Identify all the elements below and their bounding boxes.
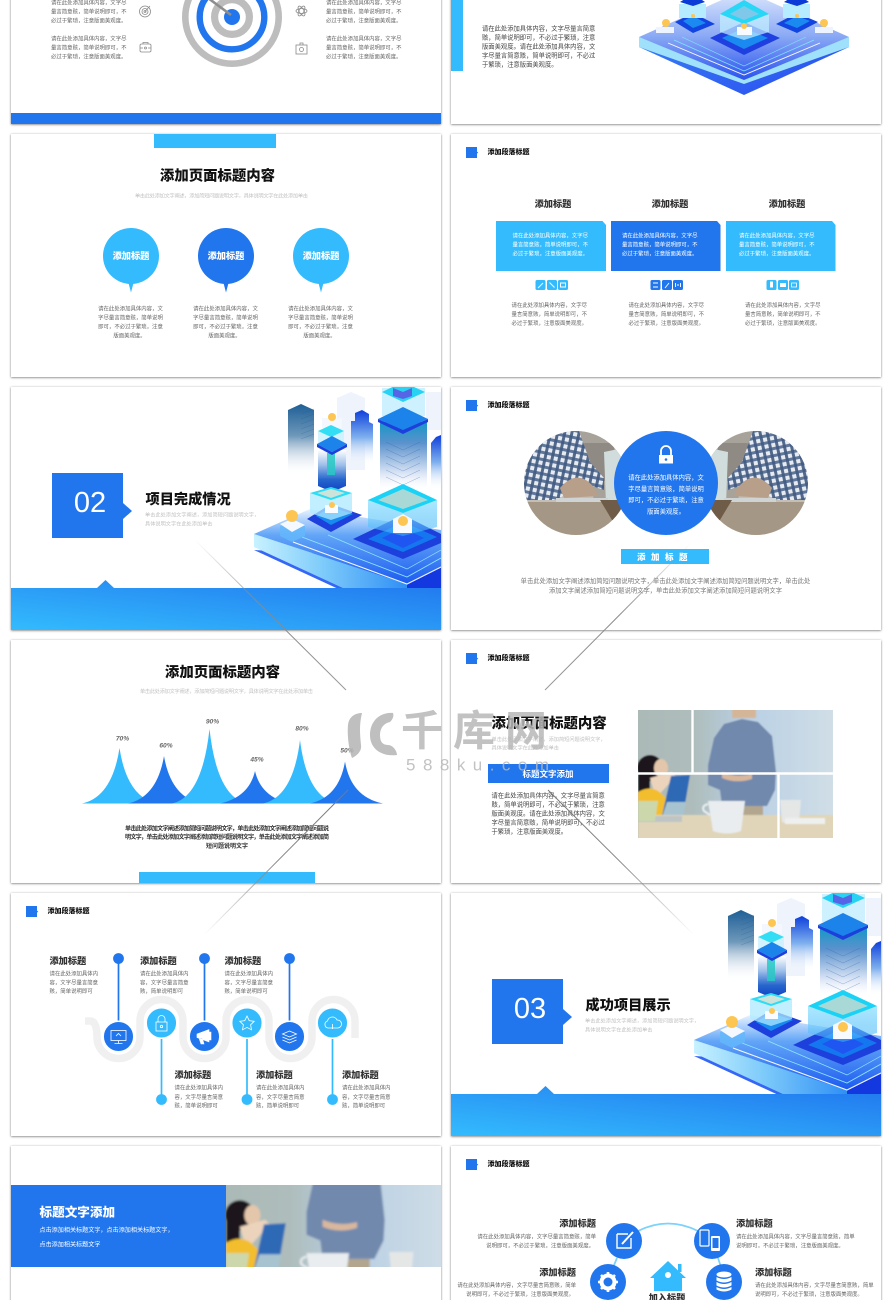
title: 添加页面标题内容 — [165, 663, 281, 681]
item: lower right: 添加标题 — [755, 1266, 793, 1278]
chart: peaks: 45% — [249, 756, 264, 764]
text block: top right: 请在此处添加具体内容，文字尽 — [326, 0, 402, 6]
chart: peaks: 80% — [295, 726, 309, 732]
watermark logo — [348, 713, 397, 758]
node: monitor — [103, 1021, 134, 1052]
stems and dots — [113, 953, 338, 1105]
pin 2 — [198, 228, 254, 292]
node: layers — [274, 1021, 305, 1052]
item 1 — [50, 955, 99, 995]
watermark url: 588ku.com — [406, 756, 549, 774]
text block: 于繁琐，注意版面美观度。 — [482, 60, 558, 68]
text block 2: 即可，不必过于繁琐，注意 — [193, 322, 258, 330]
subtitle: 单击此处添加文字阐述，添加简短问题说明文字，具体说明文字在此处添加单击 — [135, 192, 308, 200]
item 6: 添加标题 — [342, 1069, 380, 1080]
panel: section 03 — [451, 888, 881, 1136]
icon: atom — [296, 5, 307, 17]
text block: 字尽量言简意赅，简单说明即可，不必过 — [482, 50, 596, 60]
item 2: 请在此处添加具体内 — [140, 970, 189, 978]
text block: lower left: 请在此处添加具体内容，文字尽 — [51, 34, 127, 42]
text block 3: 即可，不必过于繁琐，注意 — [288, 322, 353, 330]
subtitle: 具体说明文字在此处添加单击 — [145, 520, 212, 528]
item: lower left: 说明即可，不必过于繁琐，注意版面美观度。 — [466, 1290, 574, 1298]
card 1: 请在此处添加具体内容，文字尽 — [512, 232, 589, 240]
item: lower right: 说明即可，不必过于繁琐，注意版面美观度。 — [755, 1290, 863, 1298]
lower text 2: 量言简意赅，简单说明即可，不 — [628, 310, 705, 318]
diagonal watermark lines — [195, 540, 694, 935]
body text: 单击此处添加文字阐述添加简短问题说明文字，单击此处添加文字阐述添加简短问题说明文字，单击此处 — [521, 576, 811, 585]
item 6: 赅，简单说明即可 — [342, 1102, 386, 1110]
column titles: 添加标题 — [652, 198, 689, 209]
item 6 — [342, 1069, 391, 1110]
section heading: 添加段落标题 — [488, 400, 530, 409]
text block: top right: 必过于繁琐，注意版面美观度。 — [326, 16, 401, 24]
text block: 请在此处添加具体内容，文字尽量言简意 — [492, 790, 605, 800]
text block 1 — [98, 304, 163, 340]
card 2 — [611, 221, 720, 271]
item: upper left — [477, 1218, 597, 1250]
item: upper right — [736, 1218, 855, 1250]
node: devices — [694, 1223, 730, 1259]
number box: 02 — [74, 487, 106, 519]
panel: slide 3 three pins — [11, 134, 441, 377]
node: edit — [606, 1223, 642, 1259]
center circle — [614, 431, 718, 535]
panel: slide 8 photo grid — [451, 640, 881, 883]
text block: 请在此处添加具体内容，文字尽量言简意 — [482, 24, 595, 32]
panel: slide 6 circles — [451, 387, 881, 630]
card 1: 量言简意赅，简单说明即可，不 — [512, 240, 589, 248]
item 3: 容，文字尽量言简意 — [224, 978, 274, 986]
section heading: 添加段落标题 — [488, 147, 530, 156]
text block: lower right: 量言简意赅，简单说明即可，不 — [326, 43, 402, 51]
banner: title block — [11, 1185, 226, 1267]
label bar: 添加标题 — [637, 552, 693, 562]
item 4: 请在此处添加具体内 — [174, 1084, 223, 1092]
label bar — [621, 549, 709, 564]
lower text 1: 请在此处添加具体内容，文字尽 — [512, 301, 588, 309]
text block 3: 字尽量言简意赅，简单说明 — [288, 314, 353, 322]
text block 2 — [193, 304, 258, 340]
subtitle: 单击此处添加文字阐述，添加简短问题说明文字，具体说明文字在此处添加单击 — [140, 687, 313, 695]
icon: lock — [659, 446, 673, 464]
watermark: logo and site name — [348, 708, 557, 774]
item 5: 请在此处添加具体内 — [256, 1084, 305, 1092]
footer bar — [11, 113, 441, 124]
item 5: 赅，简单说明即可 — [256, 1102, 300, 1110]
card 1 — [496, 221, 606, 271]
subtitle: 单击此处添加文字阐述，添加简短问题说明文字， — [492, 735, 606, 743]
text block: top left: 必过于繁琐，注意版面美观度。 — [51, 16, 126, 24]
text block: top left — [51, 0, 127, 24]
photo: right circle — [704, 431, 808, 535]
label bar — [488, 764, 609, 783]
column titles — [535, 198, 806, 209]
text block: lower left: 量言简意赅，简单说明即可，不 — [51, 43, 127, 51]
card 2: 量言简意赅，简单说明即可，不 — [622, 240, 698, 248]
lower text 1 — [512, 301, 588, 327]
number box: 03 — [514, 993, 546, 1025]
card 3 — [726, 221, 836, 271]
text block: 于繁琐，注意版面美观度。 — [492, 826, 567, 836]
item 5: 添加标题 — [256, 1069, 294, 1080]
banner: photo — [226, 1185, 441, 1267]
item 4 — [174, 1069, 224, 1110]
section heading: 添加段落标题 — [488, 653, 530, 662]
center circle: 版面美观度。 — [647, 506, 685, 516]
banner: title block: 标题文字添加 — [40, 1204, 115, 1220]
text block: lower right: 必过于繁琐，注意版面美观度。 — [326, 52, 401, 60]
card 1: 必过于繁琐，注意版面美观度。 — [512, 250, 588, 258]
text block 1: 字尽量言简意赅，简单说明 — [98, 314, 163, 322]
item 3: 赅，简单说明即可 — [224, 987, 268, 995]
text block: top left: 请在此处添加具体内容，文字尽 — [51, 0, 127, 6]
photo grid — [638, 710, 833, 838]
icon: badge — [296, 43, 307, 54]
text block: lower left: 必过于繁琐，注意版面美观度。 — [51, 52, 126, 60]
lower text 3: 必过于繁琐，注意版面美观度。 — [745, 319, 820, 327]
subtitle: 具体说明文字在此处添加单击 — [585, 1026, 652, 1034]
text block 1: 请在此处添加具体内容，文 — [98, 304, 163, 312]
node: star — [232, 1008, 262, 1038]
illustration: isometric platform — [639, 0, 849, 95]
pin 3 — [293, 228, 349, 292]
text block: top right — [326, 0, 402, 24]
photo: left circle — [524, 431, 628, 535]
card 3: 量言简意赅，简单说明即可，不 — [739, 240, 815, 248]
text block 1: 版面美观度。 — [113, 332, 146, 340]
illustration: isometric city — [254, 382, 441, 606]
lower text 3: 量言简意赅，简单说明即可，不 — [745, 310, 821, 318]
chart: peaks: 50% — [340, 748, 354, 754]
subtitle — [585, 1016, 699, 1034]
text block: lower right: 请在此处添加具体内容，文字尽 — [326, 34, 402, 42]
lower text 1: 量言简意赅，简单说明即可，不 — [512, 310, 588, 318]
number box — [492, 979, 572, 1044]
illustration: isometric city — [694, 888, 881, 1112]
item 3: 请在此处添加具体内 — [224, 970, 273, 978]
bottom tab — [139, 872, 315, 883]
text block: 单击此处添加文字阐述添加简短问题说明文字，单击此处添加文字阐述添加简短问题说 — [125, 824, 329, 832]
panel: slide 9 timeline — [11, 893, 441, 1136]
text block — [492, 790, 606, 836]
node: gear — [590, 1264, 626, 1300]
text block: top right: 量言简意赅，简单说明即可，不 — [326, 7, 402, 15]
text block 3: 请在此处添加具体内容，文 — [288, 304, 353, 312]
section heading — [26, 906, 90, 917]
item 1: 请在此处添加具体内 — [50, 970, 98, 978]
item: lower left: 添加标题 — [539, 1266, 577, 1278]
section heading: 添加段落标题 — [48, 906, 90, 915]
center circle: 字尽量言简意赅，简单说明 — [628, 484, 704, 493]
section heading — [466, 147, 530, 158]
item: upper left: 添加标题 — [559, 1218, 597, 1228]
item 2: 容，文字尽量言简意 — [140, 978, 189, 986]
card 2: 请在此处添加具体内容，文字尽 — [622, 232, 698, 240]
panel: section 02 — [11, 382, 441, 630]
icons: card 2 row — [650, 280, 683, 290]
watermark text: 千库网 — [401, 708, 557, 754]
pin 3: 添加标题 — [303, 250, 340, 261]
card 3: 请在此处添加具体内容，文字尽 — [739, 232, 815, 240]
icon: house — [650, 1261, 686, 1291]
panel: slide 2 isometric platform — [451, 0, 881, 124]
banner: title block: 点击添加相关标题文字，点击添加相关标题文字， — [40, 1226, 174, 1234]
text block 3 — [288, 304, 353, 340]
icon: briefcase — [140, 42, 151, 52]
node: lock — [146, 1008, 177, 1038]
column titles: 添加标题 — [535, 198, 572, 209]
top tab — [154, 134, 276, 148]
item 6: 请在此处添加具体内 — [342, 1084, 391, 1092]
text block — [482, 24, 596, 68]
section heading — [466, 1159, 530, 1170]
lower text 2 — [628, 301, 705, 327]
panel: slide 12 hub — [451, 1146, 881, 1300]
item: upper right: 请在此处添加具体内容，文字尽量言简意赅，简单 — [736, 1232, 855, 1240]
node: megaphone — [189, 1021, 220, 1052]
panel: slide 11 banner — [11, 1137, 462, 1300]
item: lower left: 请在此处添加具体内容，文字尽量言简意赅，简单 — [457, 1281, 577, 1289]
pin 1 — [103, 228, 159, 292]
lower text 3 — [745, 301, 821, 327]
body text — [521, 576, 811, 594]
chart: peaks: 60% — [159, 742, 173, 750]
connector arcs — [612, 1224, 722, 1270]
item 2: 添加标题 — [140, 955, 178, 966]
lower text 2: 必过于繁琐，注意版面美观度。 — [628, 319, 704, 327]
bottom band — [11, 580, 441, 630]
panel: slide 7 peak chart — [11, 640, 441, 883]
chart: peaks: 70% — [116, 736, 129, 742]
lower text 3: 请在此处添加具体内容，文字尽 — [745, 301, 821, 309]
column titles: 添加标题 — [769, 198, 806, 209]
number box — [52, 473, 132, 538]
item 5: 容，文字尽量言简意 — [256, 1093, 305, 1101]
lower text 2: 请在此处添加具体内容，文字尽 — [628, 301, 705, 309]
subtitle: 具体说明文字在此处添加单击 — [492, 744, 559, 752]
center circle: 请在此处添加具体内容，文 — [628, 472, 704, 482]
title: 项目完成情况 — [146, 491, 231, 508]
chart: peaks — [82, 718, 383, 804]
card 3: 必过于繁琐，注意版面美观度。 — [739, 250, 814, 258]
panel: slide 4 three cards — [451, 134, 881, 377]
item 6: 容，文字尽量言简意 — [342, 1093, 391, 1101]
text block 2: 字尽量言简意赅，简单说明 — [193, 314, 258, 322]
text block: 赅，简单说明即可，不必过于繁琐，注意 — [482, 32, 595, 42]
panel: slide 1 target overview — [11, 0, 441, 124]
item 4: 赅，简单说明即可 — [174, 1102, 218, 1110]
item: upper left: 请在此处添加具体内容，文字尽量言简意赅，简单 — [477, 1232, 597, 1240]
title: 添加页面标题内容 — [492, 714, 607, 732]
text block 2: 版面美观度。 — [208, 332, 241, 340]
subtitle — [145, 510, 259, 528]
pin 1: 添加标题 — [113, 250, 150, 261]
text block: 赅，简单说明即可，不必过于繁琐，注意 — [492, 800, 605, 808]
icon: target — [140, 6, 150, 17]
item: upper right: 添加标题 — [736, 1218, 774, 1228]
text block: lower right — [326, 34, 402, 60]
card 2: 必过于繁琐，注意版面美观度。 — [622, 250, 697, 258]
text block: 短问题说明文字 — [206, 842, 248, 850]
item 4: 容，文字尽量言简意 — [174, 1093, 224, 1101]
section heading — [466, 653, 530, 664]
section heading — [466, 400, 530, 411]
item: lower right — [755, 1266, 874, 1298]
item 3: 添加标题 — [224, 955, 262, 966]
item: upper left: 说明即可，不必过于繁琐，注意版面美观度。 — [486, 1242, 594, 1250]
title: 成功项目展示 — [586, 997, 671, 1014]
item 1: 添加标题 — [50, 955, 87, 966]
text block — [125, 824, 329, 850]
banner: title block: 点击添加相关标题文字 — [40, 1240, 100, 1248]
item: lower left — [457, 1266, 577, 1298]
item 5 — [256, 1069, 305, 1110]
subtitle: 单击此处添加文字阐述，添加简短问题说明文字， — [585, 1016, 699, 1024]
chart: peaks: 90% — [206, 718, 219, 726]
item 3 — [224, 955, 274, 995]
body text: 添加文字阐述添加简短问题说明文字，单击此处添加文字阐述添加简短问题说明文字 — [549, 586, 782, 594]
center circle: 即可，不必过于繁琐，注意 — [628, 495, 704, 504]
item: upper right: 说明即可，不必过于繁琐，注意版面美观度。 — [736, 1242, 844, 1250]
node: database — [706, 1264, 742, 1300]
icons: card 1 row — [536, 280, 568, 290]
text block 2: 请在此处添加具体内容，文 — [193, 304, 258, 312]
text block: lower left — [51, 34, 127, 60]
title: 添加页面标题内容 — [160, 166, 276, 184]
snake track — [85, 1000, 355, 1058]
text block 3: 版面美观度。 — [303, 332, 336, 340]
text block: 字尽量言简意赅，简单说明即可，不必过 — [492, 818, 606, 826]
item 1: 赅，简单说明即可 — [50, 987, 93, 995]
item 2: 赅，简单说明即可 — [140, 987, 184, 995]
item 4: 添加标题 — [174, 1069, 212, 1080]
section heading: 添加段落标题 — [488, 1159, 530, 1168]
subtitle — [492, 735, 606, 752]
item 2 — [140, 955, 189, 995]
text block 1: 即可，不必过于繁琐，注意 — [98, 322, 163, 330]
subtitle: 单击此处添加文字阐述，添加简短问题说明文字， — [145, 510, 259, 518]
label bar: 标题文字添加 — [522, 769, 574, 779]
bottom band — [451, 1086, 881, 1136]
chart: target rings with arrow — [185, 0, 279, 64]
item 1: 容，文字尽量言简意 — [50, 978, 99, 986]
item: lower right: 请在此处添加具体内容，文字尽量言简意赅，简单 — [755, 1281, 874, 1289]
lower text 1: 必过于繁琐，注意版面美观度。 — [512, 319, 587, 327]
text block: top left: 量言简意赅，简单说明即可，不 — [51, 7, 127, 15]
pin 2: 添加标题 — [208, 250, 245, 261]
node: cloud — [317, 1008, 348, 1038]
icons: card 3 row — [766, 280, 799, 290]
text block: 版面美观度。请在此处添加具体内容，文 — [482, 42, 596, 50]
text block: 明文字，单击此处添加文字阐述添加简短问题说明文字，单击此处添加文字阐述添加简 — [125, 833, 329, 841]
accent bar — [451, 0, 463, 71]
text block: 版面美观度。请在此处添加具体内容，文 — [492, 808, 606, 818]
